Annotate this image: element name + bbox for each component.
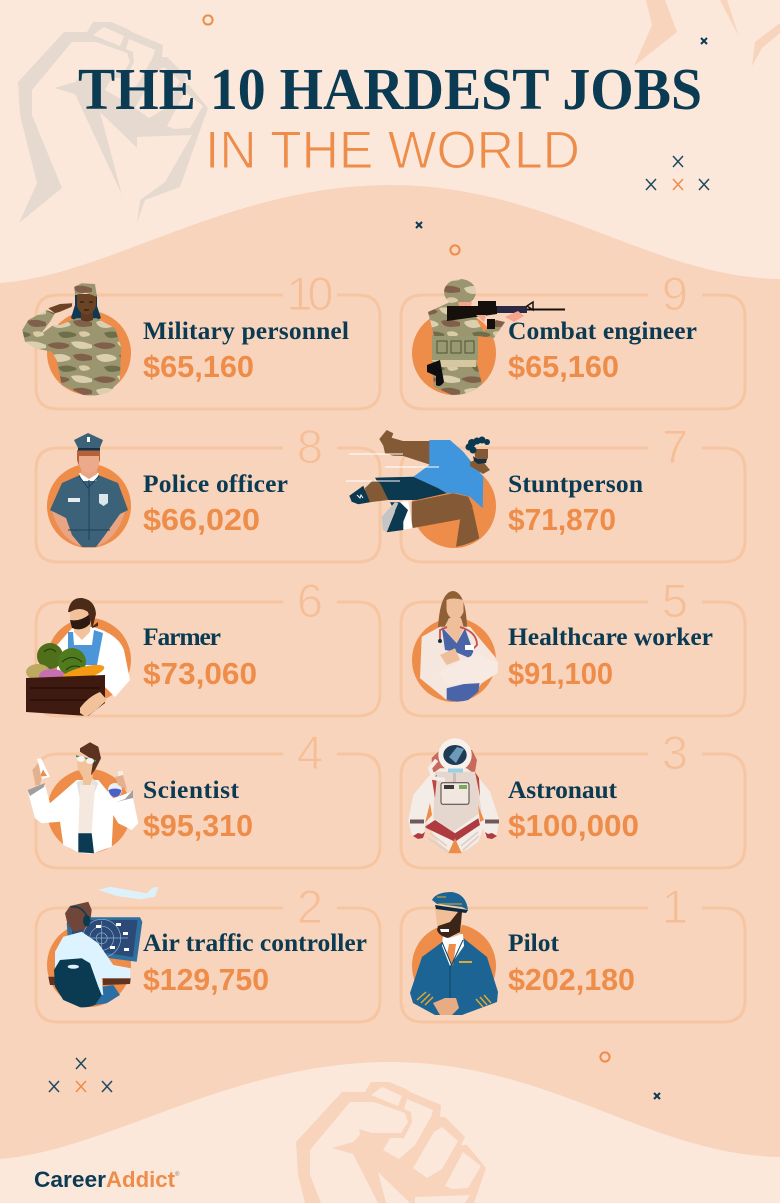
- title: IN THE WORLD: [205, 121, 580, 180]
- card 8: police officer: Police officer: [143, 469, 288, 498]
- card 6: farmer: 6: [297, 574, 323, 627]
- icon: jumping stuntperson: [346, 430, 490, 547]
- card 2: air traffic controller: Air traffic controller: [143, 928, 367, 957]
- card 4: scientist: [28, 726, 380, 868]
- card 9: combat engineer: 9: [662, 267, 688, 320]
- card 10: military personnel: Military personnel: [143, 316, 349, 345]
- card 8: police officer: 8: [297, 420, 323, 473]
- icon: soldier with rifle: [427, 279, 565, 395]
- card 4: scientist: $95,310: [143, 809, 253, 843]
- card 5: healthcare worker: 5: [662, 574, 688, 627]
- icon: bottom fist watermark: [296, 1082, 486, 1203]
- card 9: combat engineer: $65,160: [508, 350, 619, 384]
- card 5: healthcare worker: $91,100: [508, 657, 613, 691]
- icon: pilot: [410, 892, 498, 1015]
- card 2: air traffic controller: [36, 880, 380, 1022]
- logo: CareerAddict: Career: [34, 1167, 106, 1192]
- card 5: healthcare worker: Healthcare worker: [508, 622, 713, 651]
- card 7: stuntperson: Stuntperson: [508, 469, 643, 498]
- icon: top right fist fragments: [634, 0, 780, 66]
- card 6: farmer: [26, 574, 380, 717]
- card 10: military personnel: 10: [286, 267, 334, 320]
- logo: CareerAddict: Addict: [106, 1167, 175, 1192]
- top light wave: [0, 0, 780, 283]
- icon: air traffic controller with plane: [48, 887, 158, 1007]
- icon: farmer with crate: [26, 598, 130, 717]
- card 7: stuntperson: [346, 420, 745, 562]
- bottom light wave: [0, 1062, 780, 1203]
- icon: astronaut: [408, 738, 499, 853]
- icon: saluting soldier: [22, 283, 121, 396]
- icon: healthcare worker: [420, 591, 498, 702]
- card 10: military personnel: [22, 267, 380, 409]
- card 3: astronaut: 3: [662, 726, 688, 779]
- card 10: military personnel: $65,160: [143, 350, 254, 384]
- card 5: healthcare worker: [401, 574, 745, 716]
- icon: top fist watermark: [18, 22, 208, 223]
- title: [78, 56, 702, 180]
- card 3: astronaut: $100,000: [508, 809, 639, 843]
- card 8: police officer: $66,020: [143, 503, 260, 537]
- icon: police officer: [50, 433, 128, 548]
- card 1: pilot: $202,180: [508, 963, 635, 997]
- decorative markers: [49, 15, 709, 1099]
- logo: CareerAddict: ®: [175, 1171, 180, 1178]
- card 4: scientist: 4: [297, 726, 323, 779]
- card 7: stuntperson: $71,870: [508, 503, 616, 537]
- card 4: scientist: Scientist: [143, 775, 240, 804]
- card 1: pilot: [401, 880, 745, 1022]
- icon: scientist with flasks: [28, 742, 138, 854]
- card 3: astronaut: [401, 726, 745, 868]
- card 1: pilot: 1: [662, 880, 688, 933]
- card 2: air traffic controller: 2: [297, 880, 323, 933]
- card 9: combat engineer: Combat engineer: [508, 316, 697, 345]
- logo: CareerAddict: [34, 1167, 180, 1192]
- title: THE 10 HARDEST JOBS: [78, 56, 702, 122]
- card 7: stuntperson: 7: [662, 420, 688, 473]
- card 1: pilot: Pilot: [508, 928, 560, 957]
- card 8: police officer: [36, 420, 380, 562]
- card 6: farmer: $73,060: [143, 657, 257, 691]
- card 9: combat engineer: [401, 267, 745, 409]
- card 6: farmer: Farmer: [143, 622, 221, 651]
- card 3: astronaut: Astronaut: [508, 775, 618, 804]
- card 2: air traffic controller: $129,750: [143, 963, 269, 997]
